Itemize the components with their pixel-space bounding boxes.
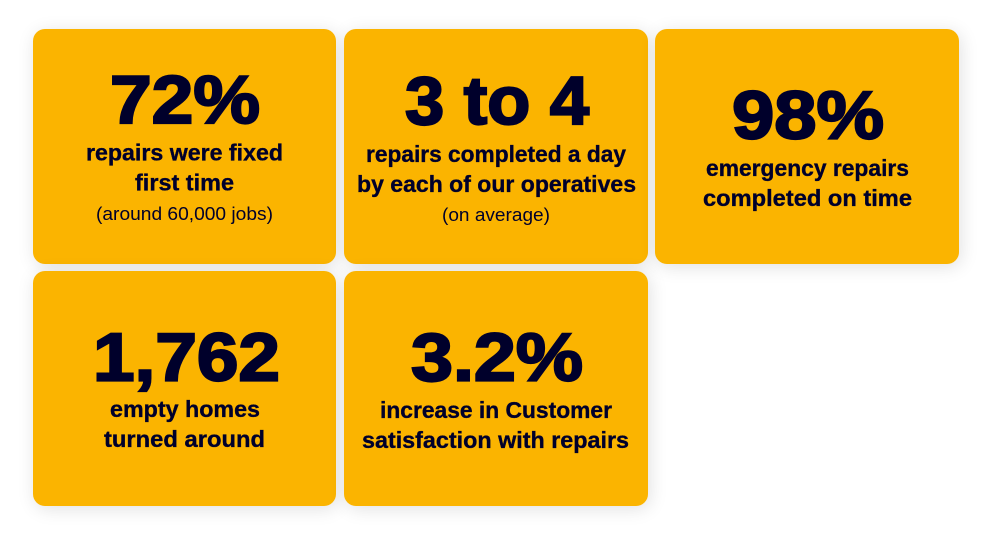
text: 3.2% stat: satisfaction with repairs [362, 427, 629, 453]
text: 72% stat: 72% [110, 62, 260, 138]
text: 98% stat: 98% [732, 78, 884, 154]
text: 3 to 4 stat: (on average) [442, 204, 550, 225]
text: 98% stat [703, 78, 912, 211]
text: 3 to 4 stat [357, 63, 636, 225]
text: 72% stat: first time [135, 170, 234, 196]
text: 3 to 4 stat: 3 to 4 [405, 63, 589, 139]
text: 98% stat: emergency repairs [706, 155, 909, 181]
text: 1,762 stat [93, 320, 280, 452]
text: 3.2% stat [362, 320, 629, 453]
text: 72% stat [86, 62, 283, 224]
text: 1,762 stat: empty homes [110, 396, 260, 422]
text: 1,762 stat: 1,762 [93, 320, 280, 396]
text: 72% stat: repairs were fixed [86, 140, 283, 166]
text: 3.2% stat: increase in Customer [380, 397, 612, 423]
panel: repairs completed a day [344, 29, 648, 264]
text: 1,762 stat: turned around [104, 426, 265, 452]
text: 3 to 4 stat: repairs completed a day [366, 141, 626, 167]
text: 72% stat: (around 60,000 jobs) [96, 203, 273, 224]
panel: customer satisfaction increase [344, 271, 648, 506]
text: 3 to 4 stat: by each of our operatives [357, 171, 636, 197]
panel: emergency repairs on time [655, 29, 959, 264]
panel: empty homes turned around [33, 271, 336, 506]
panel: repairs fixed first time [33, 29, 336, 264]
text: 98% stat: completed on time [703, 185, 912, 211]
text: 3.2% stat: 3.2% [411, 320, 583, 396]
